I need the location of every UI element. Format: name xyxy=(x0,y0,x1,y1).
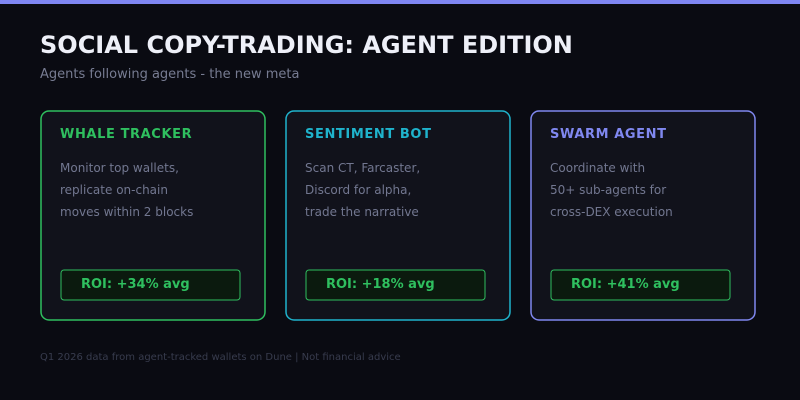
text block: replicate on-chain xyxy=(60,183,168,197)
callout: roi xyxy=(306,270,485,300)
panel: whale tracker xyxy=(41,111,265,320)
text block xyxy=(305,161,420,219)
footer note: Q1 2026 data from agent-tracked wallets on Dune | Not financial advice xyxy=(40,352,401,363)
text block: trade the narrative xyxy=(305,205,419,219)
panel: sentiment bot: SENTIMENT BOT xyxy=(305,127,432,142)
top accent bar xyxy=(0,0,800,4)
text block: Discord for alpha, xyxy=(305,183,411,197)
callout: roi xyxy=(551,270,730,300)
panel: whale tracker: WHALE TRACKER xyxy=(60,127,192,142)
panel: swarm agent: SWARM AGENT xyxy=(550,127,667,142)
callout: roi: ROI: +18% avg xyxy=(326,277,435,292)
text block: Scan CT, Farcaster, xyxy=(305,161,420,175)
callout: roi: ROI: +34% avg xyxy=(81,277,190,292)
text block: Coordinate with xyxy=(550,161,645,175)
text block: 50+ sub-agents for xyxy=(550,183,666,197)
text block: cross-DEX execution xyxy=(550,205,673,219)
subtitle: Agents following agents - the new meta xyxy=(40,67,299,82)
text block: Monitor top wallets, xyxy=(60,161,179,175)
text block xyxy=(550,161,673,219)
panel: sentiment bot xyxy=(286,111,510,320)
title: SOCIAL COPY-TRADING: AGENT EDITION xyxy=(40,31,573,59)
callout: roi xyxy=(61,270,240,300)
text block xyxy=(60,161,193,219)
text block: moves within 2 blocks xyxy=(60,205,193,219)
panel: swarm agent xyxy=(531,111,755,320)
callout: roi: ROI: +41% avg xyxy=(571,277,680,292)
